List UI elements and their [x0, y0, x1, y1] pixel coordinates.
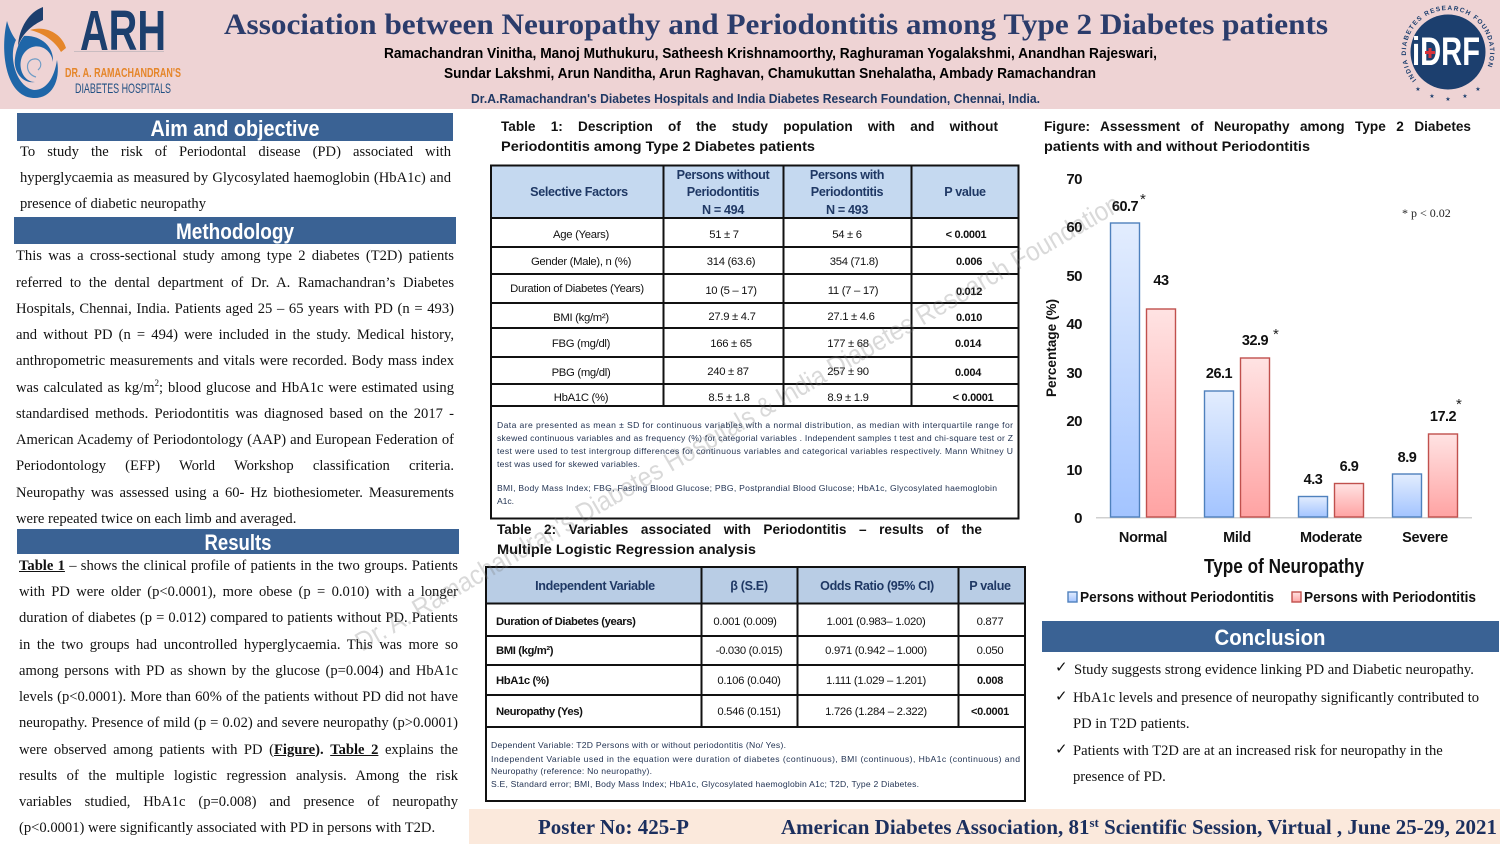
- table 2: [486, 567, 1025, 801]
- table 2 body rows: <0.0001: [971, 706, 1009, 718]
- table 2 header row: [535, 579, 1011, 593]
- text: anthropometric measurements and vitals were recorded. Body mass index: [16, 353, 454, 369]
- table 1 body rows: 27.9 ± 4.7: [708, 311, 756, 323]
- table 1 body rows: 0.012: [956, 286, 982, 298]
- table 1 body rows: 166 ± 65: [710, 338, 752, 350]
- logo: ARH Diabetes Hospitals: [4, 0, 181, 98]
- text: presence of PD.: [1073, 769, 1166, 785]
- table 1 body rows: PBG (mg/dl): [552, 367, 611, 379]
- table 1 body rows: 0.006: [956, 256, 982, 268]
- table 1 body rows: Gender (Male), n (%): [531, 256, 632, 268]
- text: Neuropathy was assessed using a 60- Hz biothesiometer. Measurements: [16, 485, 454, 501]
- value labels: [1112, 199, 1457, 488]
- logo: IDRF: INDIA DIABETES RESEARCH FOUNDATION: [1402, 6, 1494, 82]
- value labels: 8.9: [1398, 450, 1417, 466]
- table 1 body rows: 354 (71.8): [830, 256, 879, 268]
- table 2 header row: Independent Variable: [535, 579, 655, 593]
- text: Periodontology (EFP) World Workshop classification criteria.: [16, 458, 454, 474]
- table 1 footnote: skewed continuous variables and as frequency (%) for categorial variables . Independent samples t test and chi-square test or Z: [497, 433, 1013, 443]
- logo: ARH Diabetes Hospitals: ARH: [80, 0, 166, 63]
- text block: methodology: [16, 248, 454, 527]
- bars: [1110, 223, 1458, 517]
- table 2 header row: P value: [969, 579, 1011, 593]
- logo: IDRF: ★: [1415, 86, 1421, 93]
- authors: Ramachandran Vinitha, Manoj Muthukuru, Satheesh Krishnamoorthy, Raghuraman Yogalakshmi, Anandhan Rajeswari,: [384, 45, 1157, 62]
- text: Patients with T2D are at an increased risk for neuropathy in the: [1073, 743, 1443, 759]
- table 1 body rows: 257 ± 90: [827, 366, 869, 378]
- y axis labels: 0: [1074, 510, 1082, 527]
- section heading: Methodology: [14, 217, 456, 244]
- text block: results: [19, 558, 458, 836]
- text: Hospitals, Chennai, India. Patients aged 25 – 65 years with PD (n = 493): [16, 301, 454, 317]
- table 1 footnote: test was used for skewed variables.: [497, 459, 640, 469]
- conclusion check marks: [1055, 658, 1068, 758]
- table 1 title first line: Table 1: Description of the study population with and without: [501, 119, 998, 134]
- table 1 body rows: 0.010: [956, 312, 982, 324]
- table 2 body rows: Duration of Diabetes (years): [496, 616, 636, 628]
- table 1 header row: [530, 168, 986, 217]
- y axis labels: 50: [1066, 268, 1082, 285]
- figure title first line: Figure: Assessment of Neuropathy among Type 2 Diabetes: [1044, 119, 1471, 134]
- table 2 body rows: Neuropathy (Yes): [496, 706, 583, 718]
- table 1 footnote: Data are presented as mean ± SD for continuous variables with a normal distribution, as median with interquartile range for: [497, 420, 1013, 430]
- x axis title: Type of Neuropathy: [1204, 556, 1365, 578]
- significance stars: *: [1140, 191, 1146, 208]
- affiliation: Dr.A.Ramachandran's Diabetes Hospitals and India Diabetes Research Foundation, Chennai, India.: [471, 91, 1040, 106]
- table 1 body rows: BMI (kg/m²): [553, 312, 609, 324]
- logo: IDRF: ★: [1462, 93, 1468, 100]
- table 1 body rows: Age (Years): [553, 229, 610, 241]
- category labels: Severe: [1402, 530, 1448, 546]
- text: To study the risk of Periodontal disease (PD) associated with: [20, 144, 451, 160]
- table 2 footnote: Dependent Variable: T2D Persons with or without periodontitis (No/ Yes).: [491, 740, 786, 750]
- value labels: 4.3: [1304, 472, 1323, 488]
- table 2 footnote: Neuropathy (reference: No neuropathy).: [491, 766, 652, 776]
- table 2 body rows: BMI (kg/m²): [496, 645, 554, 657]
- text: HbA1c levels and presence of neuropathy significantly contributed to: [1073, 690, 1479, 706]
- table 2 title first line: Table 2: Variables associated with Periodontitis – results of the: [497, 522, 982, 537]
- table 1 header row: Persons without: [677, 168, 771, 182]
- conclusion check marks: ✓: [1055, 740, 1068, 758]
- section heading: Conclusion: [1042, 621, 1499, 652]
- table 1 body rows: [510, 229, 994, 404]
- table 2 header row: Odds Ratio (95% CI): [820, 579, 934, 593]
- table 2 body rows: 0.877: [977, 616, 1003, 628]
- table 1 body rows: 240 ± 87: [707, 366, 749, 378]
- significance stars: *: [1456, 396, 1462, 413]
- table 1 header row: Periodontitis: [811, 185, 884, 199]
- y axis labels: 10: [1066, 462, 1082, 479]
- table 2 body rows: 0.001 (0.009): [713, 616, 777, 628]
- text: PD in T2D patients.: [1073, 716, 1189, 732]
- text: levels (p<0.0001). More than 60% of the patients without PD did not have: [19, 689, 458, 705]
- table 2 footnote: Independent Variable used in the equation were duration of diabetes (continuous), BMI (continuous), HbA1c (continuous) and: [491, 754, 1020, 764]
- value labels: 17.2: [1430, 409, 1457, 425]
- table 2 body rows: 0.050: [977, 645, 1003, 657]
- table 1 header row: Selective Factors: [530, 185, 628, 199]
- section heading: Results: Results: [204, 530, 272, 555]
- icon: swirl: [4, 7, 66, 98]
- table 1 body rows: 10 (5 – 17): [705, 285, 757, 297]
- y axis title: Percentage (%): [1043, 299, 1059, 397]
- figure second title line: patients with and without Periodontitis: [1044, 138, 1310, 154]
- table 2 body rows: 1.726 (1.284 – 2.322): [825, 706, 927, 718]
- conference: Scientific Session, Virtual , June 25-29, 2021: [1099, 815, 1497, 839]
- table 2 footnote: S.E, Standard error; BMI, Body Mass Index; HbA1c, Glycosylated haemoglobin A1c; T2D, Type 2 Diabetes.: [491, 779, 919, 789]
- conclusion check marks: ✓: [1055, 687, 1068, 705]
- y axis labels: 30: [1066, 365, 1082, 382]
- table 1 body rows: 0.014: [955, 338, 982, 350]
- text: Table 1 – shows the clinical profile of patients in the two groups. Patients: [19, 558, 458, 574]
- conference: American Diabetes Association, 81: [781, 815, 1090, 839]
- table 1 body rows: < 0.0001: [946, 229, 987, 241]
- table 1 second title line: Periodontitis among Type 2 Diabetes patients: [501, 138, 815, 154]
- y axis labels: 20: [1066, 413, 1082, 430]
- table 2 body rows: -0.030 (0.015): [716, 645, 783, 657]
- table 1 body rows: Duration of Diabetes (Years): [510, 283, 644, 295]
- table 2 body rows: 0.546 (0.151): [717, 706, 781, 718]
- text: with PD were older (p<0.0001), more obese (p = 0.010) with a longer: [19, 584, 458, 600]
- table 1 body rows: 11 (7 – 17): [828, 285, 879, 297]
- text: variables studied, HbA1c (p=0.008) and presence of neuropathy: [19, 794, 458, 810]
- table 1 footnote: BMI, Body Mass Index; FBG, Fasting Blood Glucose; PBG, Postprandial Blood Glucose; HbA1c, Glycosylated haemoglobin: [497, 483, 997, 493]
- table 2 header row: β (S.E): [730, 579, 768, 593]
- footer band: [469, 809, 1500, 844]
- table 1 header row: P value: [944, 185, 986, 199]
- logo: IDRF: ★: [1475, 86, 1481, 93]
- text: referred to the dental department of Dr. A. Ramachandran’s Diabetes: [16, 275, 454, 291]
- text: in the two groups had uncontrolled hyperglycaemia. This was more so: [19, 637, 458, 653]
- category labels: Mild: [1223, 530, 1251, 546]
- conclusion check marks: ✓: [1055, 658, 1068, 676]
- table 1 body rows: 54 ± 6: [832, 229, 862, 241]
- bar chart: [1043, 171, 1476, 606]
- table 1 body rows: 314 (63.6): [707, 256, 756, 268]
- y axis labels: 40: [1066, 316, 1082, 333]
- text: was calculated as kg/m2; blood glucose and HbA1c were estimated using: [16, 378, 454, 396]
- section heading: Conclusion: Conclusion: [1214, 625, 1326, 650]
- table 2 body rows: [496, 616, 1009, 718]
- table 1 footnote: test were used to test intergroup differences for continuous variables and categorical variables respectively. Mann Whitney U: [497, 446, 1013, 456]
- logo: IDRF: ★: [1429, 93, 1435, 100]
- table 1 body rows: 27.1 ± 4.6: [827, 311, 875, 323]
- table 1 header row: Persons with: [810, 168, 884, 182]
- table 1 footnote: [497, 420, 1013, 506]
- text: presence of diabetic neuropathy: [20, 196, 206, 212]
- table 2 body rows: 1.001 (0.983– 1.020): [827, 616, 926, 628]
- table 1 body rows: 8.5 ± 1.8: [708, 392, 750, 404]
- table 2 footnote: [491, 740, 1020, 789]
- section heading: Aim and objective: Aim and objective: [150, 116, 320, 141]
- text: standardised methods. Periodontitis was diagnosed based on the 2017 -: [16, 406, 454, 422]
- significance stars: [1140, 191, 1462, 413]
- watermark: Dr. A. Ramachandran's Diabetes Hospitals & India Diabetes Research Foundation: [350, 189, 1126, 657]
- text: were repeated twice on each limb and averaged.: [16, 511, 296, 527]
- section heading: Results: [17, 529, 459, 555]
- y axis labels: [1066, 171, 1082, 527]
- text: neuropathy. Presence of mild (p = 0.02) and severe neuropathy (p>0.0001): [19, 715, 458, 731]
- value labels: 26.1: [1206, 366, 1233, 382]
- text: Study suggests strong evidence linking PD and Diabetic neuropathy.: [1074, 662, 1474, 678]
- value labels: 60.7: [1112, 199, 1139, 215]
- text block: aim and objective: [20, 144, 451, 212]
- logo: ARH Diabetes Hospitals: DR. A. RAMACHANDRAN'S: [65, 65, 181, 80]
- text: This was a cross-sectional study among type 2 diabetes (T2D) patients: [16, 248, 454, 264]
- table 1 body rows: FBG (mg/dl): [552, 338, 611, 350]
- text: were observed among patients with PD (Figure). Table 2 explains the: [19, 742, 458, 758]
- y axis labels: 60: [1066, 219, 1082, 236]
- table 1 footnote: A1c.: [497, 496, 514, 506]
- table 2 body rows: HbA1c (%): [496, 675, 550, 687]
- table 2 second title line: Multiple Logistic Regression analysis: [497, 541, 756, 557]
- header band: [0, 0, 1500, 109]
- category labels: Normal: [1119, 530, 1167, 546]
- y axis labels: 70: [1066, 171, 1082, 188]
- text: and without PD (n = 494) were included in the study. Medical history,: [16, 327, 454, 343]
- logo: IDRF: ★: [1445, 96, 1451, 103]
- table 2 body rows: 0.008: [977, 675, 1003, 687]
- text: among persons with PD as shown by the glucose (p=0.004) and HbA1c: [19, 663, 458, 679]
- legend: Persons without Periodontitis: [1080, 589, 1274, 606]
- table 2 body rows: 0.106 (0.040): [717, 675, 781, 687]
- table 2 body rows: 0.971 (0.942 – 1.000): [825, 645, 927, 657]
- table 1 header row: Periodontitis: [687, 185, 760, 199]
- authors: Sundar Lakshmi, Arun Nanditha, Arun Raghavan, Chamukuttan Snehalatha, Ambady Ramachandran: [444, 65, 1096, 82]
- text: (p<0.0001) were significantly associated with PD in persons with T2D.: [19, 820, 435, 836]
- table 1 body rows: 0.004: [955, 367, 982, 379]
- table 1: [491, 166, 1019, 518]
- value labels: 43: [1153, 273, 1169, 289]
- title: Association between Neuropathy and Periodontitis among Type 2 Diabetes patients: [224, 8, 1328, 41]
- table 1 body rows: 177 ± 68: [827, 338, 869, 350]
- table 1 header row: N = 494: [702, 203, 744, 217]
- text: hyperglycaemia as measured by Glycosylated haemoglobin (HbA1c) and: [20, 170, 451, 186]
- value labels: 32.9: [1242, 333, 1269, 349]
- table 2 body rows: 1.111 (1.029 – 1.201): [826, 675, 927, 687]
- value labels: 6.9: [1340, 459, 1359, 475]
- text: duration of diabetes (p = 0.012) compared to patients without PD. Patients: [19, 610, 458, 626]
- significance stars: *: [1273, 326, 1279, 343]
- text: American Academy of Periodontology (AAP) and European Federation of: [16, 432, 454, 448]
- legend: [1068, 589, 1476, 606]
- table 1 header row: N = 493: [826, 203, 868, 217]
- table 1 body rows: < 0.0001: [953, 392, 994, 404]
- category labels: [1119, 530, 1448, 546]
- table 1 body rows: 51 ± 7: [709, 229, 739, 241]
- table 1 body rows: HbA1C (%): [554, 392, 609, 404]
- legend: Persons with Periodontitis: [1304, 589, 1476, 606]
- conference: st: [1089, 815, 1100, 830]
- significance note: * p < 0.02: [1402, 206, 1451, 220]
- category labels: Moderate: [1300, 530, 1362, 546]
- section heading: Aim and objective: [17, 113, 453, 141]
- text block: conclusion: [1073, 662, 1479, 785]
- logo: ARH Diabetes Hospitals: DIABETES HOSPITALS: [75, 80, 171, 96]
- table 1 body rows: 8.9 ± 1.9: [827, 392, 869, 404]
- authors: [384, 45, 1157, 82]
- section heading: Methodology: Methodology: [176, 219, 295, 244]
- text: results of the multiple logistic regression analysis. Among the risk: [19, 768, 458, 784]
- poster number: Poster No: 425-P: [538, 815, 689, 839]
